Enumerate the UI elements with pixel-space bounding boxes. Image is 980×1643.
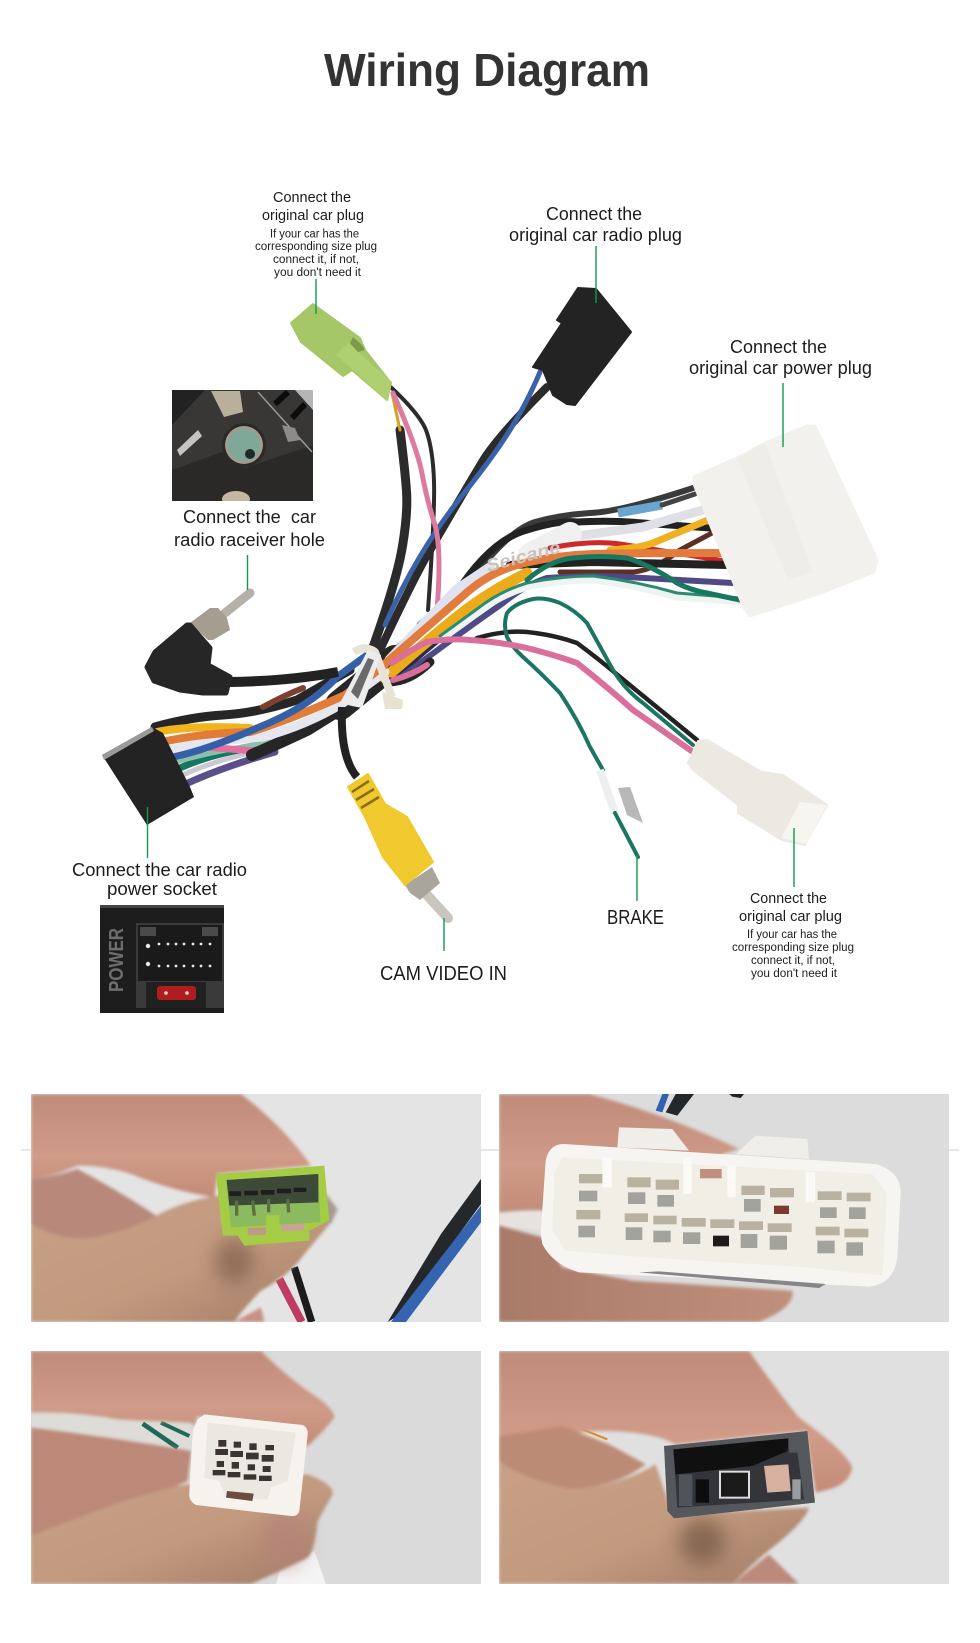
label: power socket bbox=[72, 859, 247, 899]
label: original car plug (top) bbox=[255, 190, 377, 279]
label: radio plug bbox=[509, 204, 682, 245]
label: cam video in: CAM VIDEO IN bbox=[380, 963, 507, 985]
label: power plug bbox=[689, 337, 872, 378]
inset photo: antenna receiver hole bbox=[172, 390, 313, 507]
label: original car plug (bottom): corresponding size plug bbox=[732, 942, 854, 954]
label: original car plug (bottom): original car plug bbox=[739, 909, 842, 925]
watermark: Seicane bbox=[484, 537, 562, 576]
label: power socket: Connect the car radio bbox=[72, 859, 247, 880]
label: brake: BRAKE bbox=[607, 907, 664, 929]
title: Wiring Diagram bbox=[324, 44, 650, 96]
leader lines bbox=[148, 246, 794, 951]
label: original car plug (bottom): Connect the bbox=[750, 891, 827, 907]
label: power plug: Connect the bbox=[730, 337, 827, 357]
label: original car plug (top): connect it, if not, bbox=[273, 254, 359, 266]
label: original car plug (top): you don't need it bbox=[274, 267, 362, 279]
label: original car plug (bottom): connect it, if not, bbox=[751, 955, 835, 967]
connector: white small plug bbox=[688, 740, 827, 845]
label: power plug: original car power plug bbox=[689, 358, 872, 378]
label: power socket: power socket bbox=[107, 878, 217, 899]
wires: left bundle to radio socket bbox=[155, 655, 385, 783]
label: receiver hole: Connect the car bbox=[183, 506, 316, 527]
label: radio plug: original car radio plug bbox=[509, 225, 682, 245]
photo: white power connector bbox=[499, 1094, 949, 1322]
photo: white small connector bbox=[31, 1351, 481, 1584]
connector: black radio socket bbox=[102, 727, 194, 825]
connector: antenna plug bbox=[147, 593, 338, 693]
connector: white power plug bbox=[694, 426, 877, 616]
label: receiver hole bbox=[174, 506, 325, 550]
brake wire tag bbox=[618, 787, 643, 823]
label: original car plug (bottom) bbox=[732, 891, 854, 980]
wires: pink, black and green branches bbox=[388, 598, 697, 857]
connector: yellow RCA plug bbox=[342, 707, 448, 918]
wires: upper branches bbox=[372, 372, 547, 650]
cable tie and label bbox=[340, 648, 403, 709]
label: receiver hole: radio raceiver hole bbox=[174, 529, 325, 550]
inset photo: power socket: POWER bbox=[106, 928, 128, 992]
label: radio plug: Connect the bbox=[546, 204, 642, 224]
label: original car plug (bottom): you don't need it bbox=[751, 968, 838, 980]
label: original car plug (bottom): If your car has the bbox=[747, 929, 837, 941]
photo: black connector bbox=[499, 1351, 949, 1584]
photo: green connector bbox=[31, 1094, 481, 1322]
label: original car plug (top): Connect the bbox=[273, 190, 351, 206]
wires: right bundle to power plug bbox=[340, 488, 740, 705]
inset photo: power socket bbox=[100, 905, 224, 1013]
wiring harness bbox=[155, 372, 740, 857]
connector: black radio plug bbox=[533, 288, 631, 405]
divider behind photos bbox=[21, 1149, 959, 1151]
label: original car plug (top): corresponding size plug bbox=[255, 241, 377, 253]
label: original car plug (top): original car plug bbox=[262, 208, 364, 224]
connector: green plug bbox=[291, 304, 392, 401]
label: original car plug (top): If your car has the bbox=[270, 228, 359, 240]
